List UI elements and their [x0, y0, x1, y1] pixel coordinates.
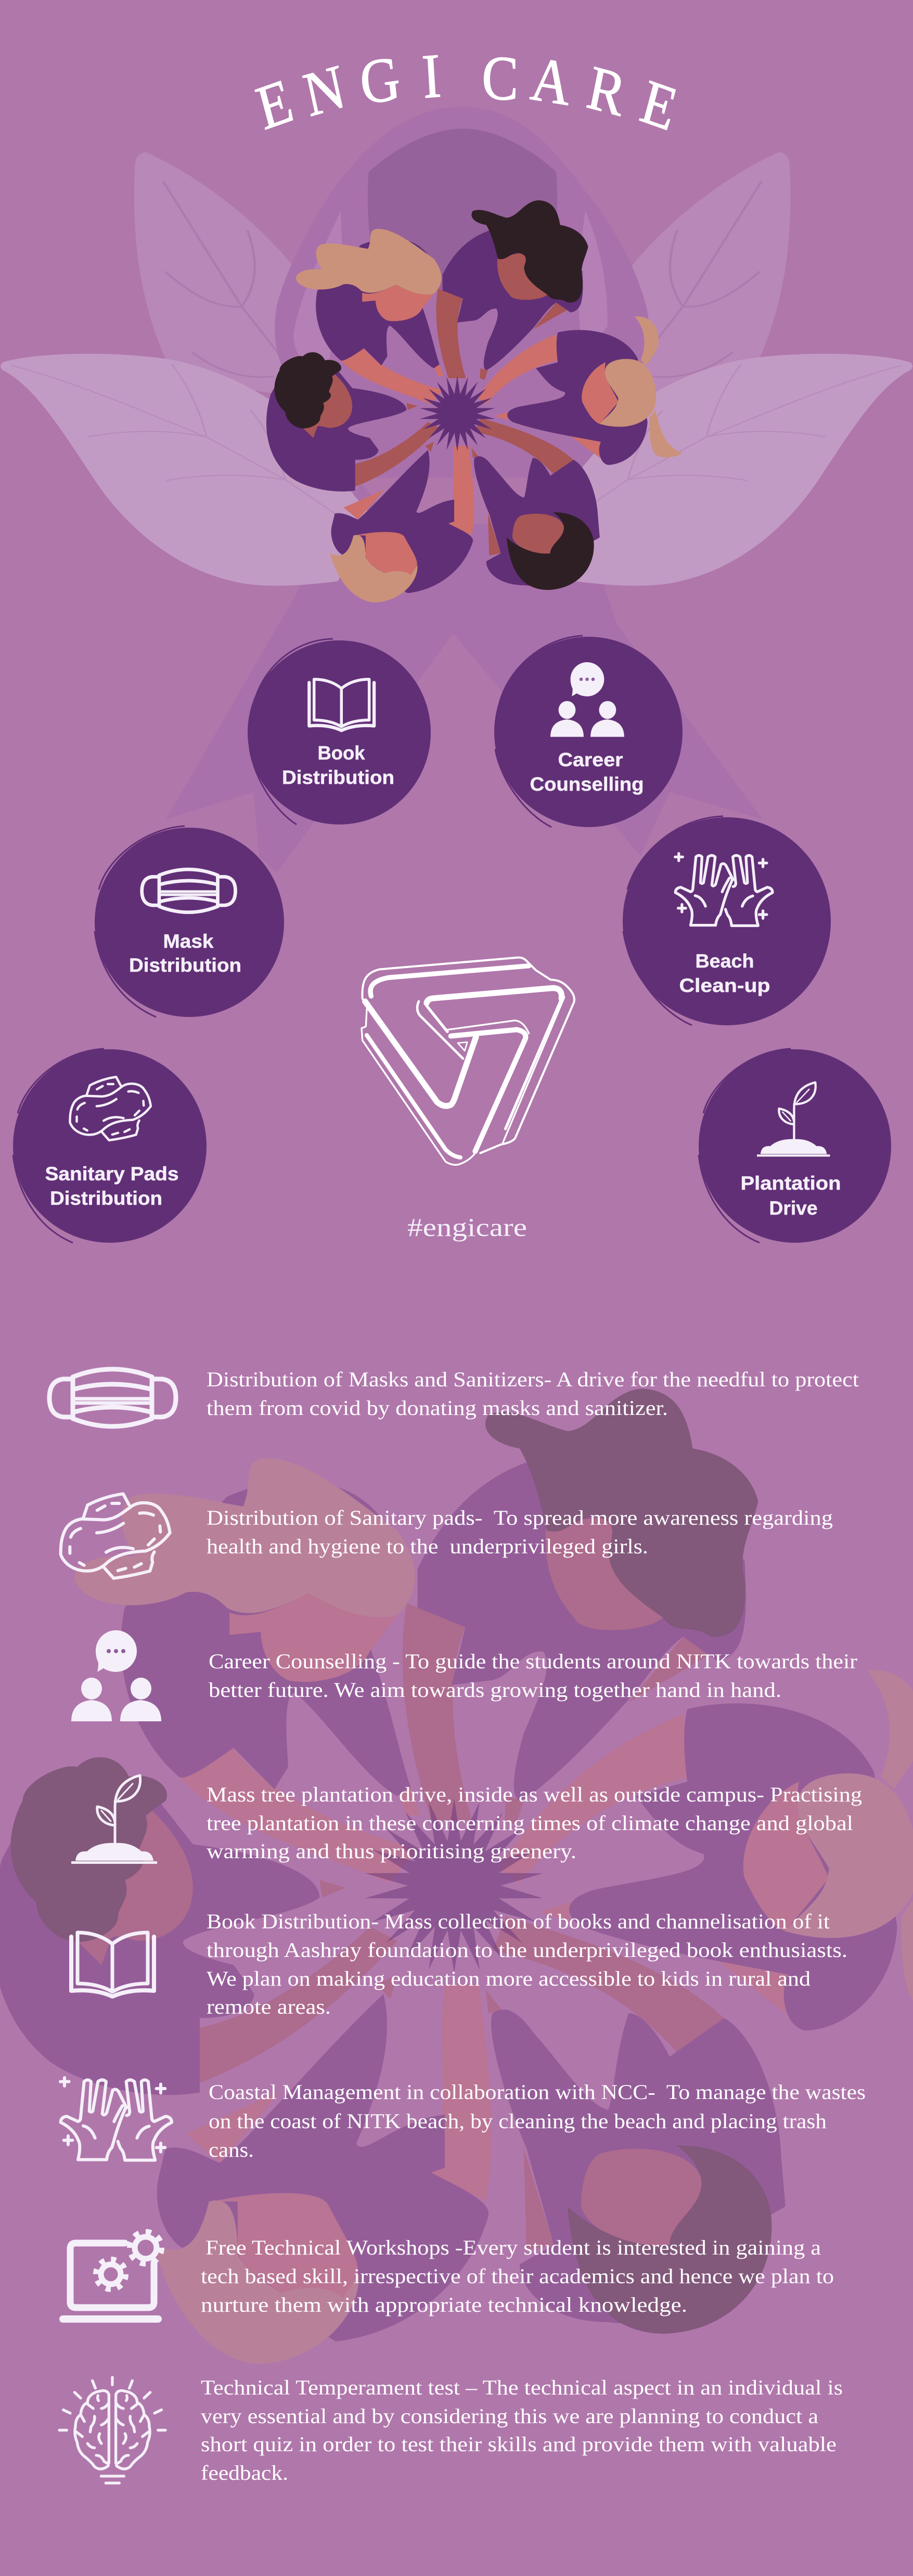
icon: two people talking	[550, 662, 624, 737]
label	[282, 742, 394, 788]
lower leaves	[1, 354, 912, 586]
text: cans.	[209, 2138, 254, 2161]
hashtag: #engicare	[407, 1213, 527, 1242]
badge: mask distribution	[95, 826, 284, 1017]
row: technical workshops	[59, 2232, 834, 2323]
row: career counselling	[71, 1630, 857, 1721]
row: coastal management	[60, 2078, 866, 2161]
badge: career counselling	[494, 636, 683, 827]
text: them from covid by donating masks and sanitizer.	[207, 1396, 668, 1420]
icon: hands	[60, 2078, 172, 2160]
row: sanitary pads	[61, 1494, 833, 1578]
label	[45, 1163, 179, 1209]
text	[207, 1368, 859, 1420]
icon: laptop with gears	[59, 2232, 162, 2323]
icon: sanitary pad	[70, 1077, 151, 1140]
label: Mask	[163, 931, 214, 952]
ribbon tails	[166, 482, 763, 873]
watermark: people in a circle	[0, 1388, 913, 2364]
badge: sanitary pads distribution	[13, 1049, 207, 1243]
text: Career Counselling - To guide the students around NITK towards their	[209, 1650, 857, 1673]
icon: hands	[675, 854, 773, 925]
text: warming and thus prioritising greenery.	[207, 1839, 576, 1863]
text: on the coast of NITK beach, by cleaning the beach and placing trash	[209, 2109, 827, 2133]
text	[201, 2376, 843, 2484]
text	[207, 1910, 847, 2018]
label: Sanitary Pads	[45, 1163, 179, 1184]
badge: beach clean-up	[623, 816, 831, 1025]
label: Plantation	[741, 1173, 841, 1194]
text: Free Technical Workshops -Every student is interested in gaining a	[205, 2236, 821, 2259]
label: Distribution	[282, 767, 394, 788]
label: Counselling	[530, 774, 644, 795]
people in a circle with star	[266, 200, 683, 602]
icon: brain bulb	[59, 2377, 165, 2483]
label	[741, 1173, 841, 1219]
illustration: ribbon, leaves and circle of people	[1, 107, 912, 873]
label	[530, 749, 644, 795]
text: Coastal Management in collaboration with NCC- To manage the wastes	[209, 2080, 866, 2104]
icon: book	[71, 1933, 154, 1997]
icon: two people talking	[71, 1630, 161, 1721]
label: Clean-up	[679, 975, 770, 996]
badge: book distribution	[248, 639, 431, 825]
label: Book	[317, 742, 365, 764]
label: Drive	[769, 1197, 818, 1219]
logo: impossible triangle	[362, 958, 574, 1165]
text: tech based skill, irrespective of their academics and hence we plan to	[201, 2264, 834, 2288]
row: technical temperament test	[59, 2376, 843, 2484]
icon: mask	[49, 1369, 176, 1426]
text: nurture them with appropriate technical knowledge.	[201, 2293, 687, 2316]
text: remote areas.	[207, 1995, 331, 2018]
label	[679, 950, 770, 996]
text: Book Distribution- Mass collection of books and channelisation of it	[207, 1910, 830, 1933]
text: Distribution of Masks and Sanitizers- A drive for the needful to protect	[207, 1368, 859, 1391]
text: feedback.	[201, 2461, 288, 2484]
text: We plan on making education more accessible to kids in rural and	[207, 1967, 811, 1990]
icon: mask	[142, 869, 236, 912]
label	[129, 931, 241, 976]
text	[207, 1506, 833, 1558]
text: short quiz in order to test their skills and provide them with valuable	[201, 2432, 837, 2456]
icon: plant	[757, 1083, 830, 1156]
text	[209, 1650, 857, 1702]
label: Beach	[695, 950, 754, 972]
row: book distribution	[71, 1910, 847, 2018]
text: Distribution of Sanitary pads- To spread more awareness regarding	[207, 1506, 833, 1529]
label: Distribution	[129, 955, 241, 976]
row: tree plantation	[71, 1775, 862, 1864]
upper leaves	[134, 152, 791, 398]
text: health and hygiene to the underprivileged girls.	[207, 1535, 648, 1558]
text	[209, 2080, 866, 2161]
row: masks	[49, 1368, 859, 1426]
text: through Aashray foundation to the underprivileged book enthusiasts.	[207, 1938, 847, 1962]
text: very essential and by considering this we are planning to conduct a	[201, 2404, 818, 2428]
icon: plant	[71, 1775, 157, 1864]
label: Career	[558, 749, 623, 770]
text: tree plantation in these concerning times of climate change and global	[207, 1811, 853, 1835]
text	[207, 1783, 862, 1863]
text: better future. We aim towards growing together hand in hand.	[209, 1678, 781, 1702]
text	[201, 2236, 834, 2316]
icon: sanitary pad	[61, 1494, 170, 1578]
label: Distribution	[50, 1188, 162, 1209]
badge: plantation drive	[699, 1049, 891, 1243]
title: ENGI CARE	[250, 41, 684, 144]
text: Technical Temperament test – The technical aspect in an individual is	[201, 2376, 843, 2399]
icon: book	[309, 679, 374, 730]
text: Mass tree plantation drive, inside as well as outside campus- Practising	[207, 1783, 862, 1806]
ribbon loop	[275, 107, 649, 478]
